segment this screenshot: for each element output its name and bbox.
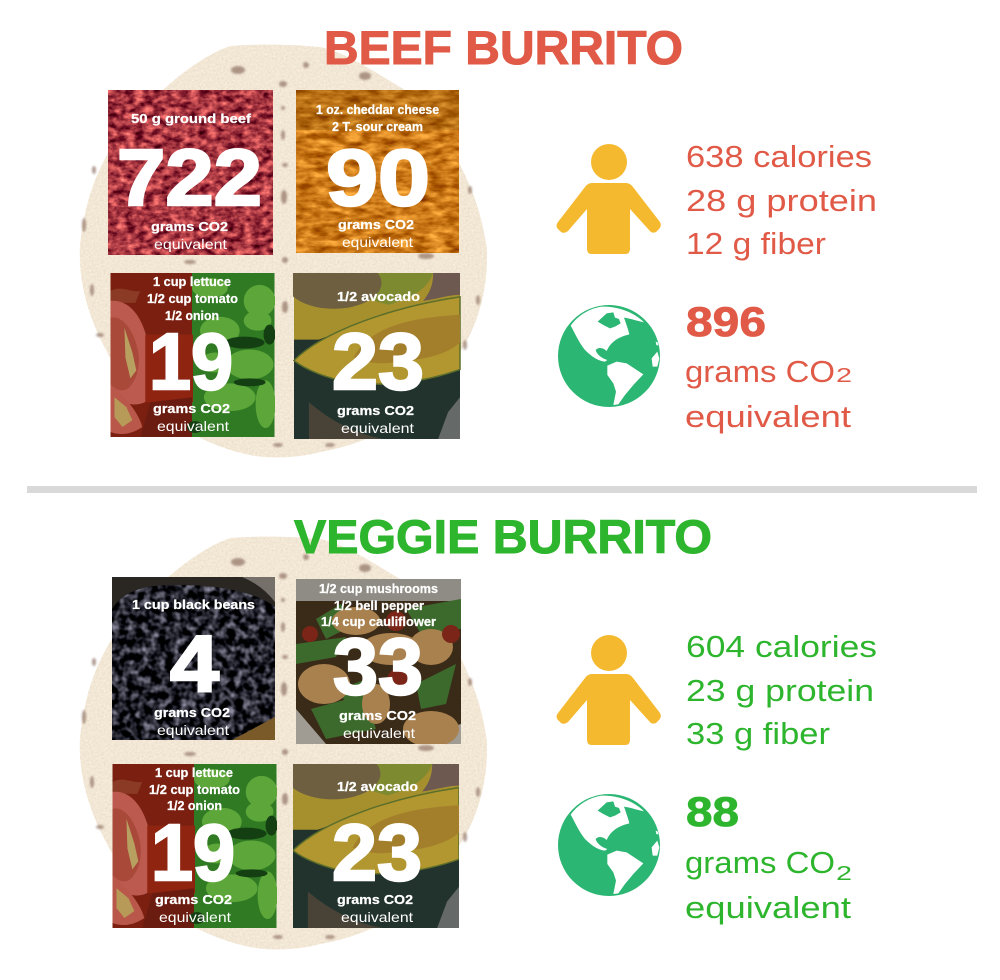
icon: person xyxy=(556,144,661,254)
emissions total: veggie: 2 xyxy=(836,863,852,885)
emissions total: veggie: 88 xyxy=(686,788,739,835)
panel: lettuce, tomato, onion: 1/2 cup tomato xyxy=(149,782,240,797)
icon: globe xyxy=(558,305,660,407)
panel: cheddar and sour cream: equivalent xyxy=(342,234,413,250)
tortilla: beef burrito background xyxy=(80,45,487,457)
panel: ground beef xyxy=(108,90,273,255)
panel: mushrooms, bell pepper, cauliflower: 1/2 bell pepper xyxy=(334,598,424,613)
emissions total: beef: grams CO xyxy=(685,354,835,389)
panel: avocado: 1/2 avocado xyxy=(337,289,420,304)
panel: avocado: grams CO2 xyxy=(337,403,414,418)
panel: black beans: grams CO2 xyxy=(154,705,230,720)
nutrition stats: beef: 638 calories xyxy=(686,139,872,174)
panel: black beans: 4 xyxy=(170,619,220,708)
panel: lettuce, tomato, onion xyxy=(112,764,277,928)
icon: globe xyxy=(558,794,660,896)
panel: lettuce, tomato, onion: grams CO2 xyxy=(153,401,230,416)
emissions total: veggie: grams CO xyxy=(685,845,835,880)
emissions total: beef: 2 xyxy=(836,365,852,387)
panel: lettuce, tomato, onion: 1/2 onion xyxy=(167,798,222,813)
panel: cheddar and sour cream: grams CO2 xyxy=(338,217,414,232)
panel: mushrooms, bell pepper, cauliflower: 1/4 cup cauliflower xyxy=(321,614,436,629)
panel: cheddar and sour cream: 1 oz. cheddar cheese xyxy=(316,102,439,117)
nutrition stats: beef: 12 g fiber xyxy=(686,226,826,261)
panel: lettuce, tomato, onion: 19 xyxy=(151,808,235,897)
title: Veggie Burrito: VEGGIE BURRITO xyxy=(294,510,712,563)
nutrition stats: beef xyxy=(686,139,877,261)
panel: black beans: equivalent xyxy=(157,722,229,738)
emissions total: beef xyxy=(685,298,852,434)
panel: black beans xyxy=(112,577,275,740)
panel: lettuce, tomato, onion: 1/2 cup tomato xyxy=(147,291,238,306)
panel: ground beef: 50 g ground beef xyxy=(131,111,252,126)
icon: person xyxy=(556,635,661,745)
emissions total: veggie xyxy=(685,788,852,925)
nutrition stats: veggie: 23 g protein xyxy=(686,673,874,708)
panel: lettuce, tomato, onion: 1 cup lettuce xyxy=(155,765,233,780)
panel: lettuce, tomato, onion: 1 cup lettuce xyxy=(153,274,231,289)
nutrition stats: veggie: 33 g fiber xyxy=(686,716,830,751)
panel: cheddar and sour cream: 90 xyxy=(326,133,430,222)
panel: lettuce, tomato, onion xyxy=(110,273,275,437)
emissions total: beef: equivalent xyxy=(685,399,851,434)
panel: mushrooms, bell pepper, cauliflower: 1/2 cup mushrooms xyxy=(319,581,438,596)
panel: avocado: grams CO2 xyxy=(337,892,413,907)
panel: ground beef: equivalent xyxy=(154,236,227,252)
panel: lettuce, tomato, onion: grams CO2 xyxy=(155,892,232,907)
panel: avocado: 1/2 avocado xyxy=(337,779,418,794)
panel: avocado: equivalent xyxy=(341,420,414,436)
panel: lettuce, tomato, onion: 1/2 onion xyxy=(165,308,219,323)
panel: cheddar and sour cream: 2 T. sour cream xyxy=(332,119,423,134)
panel: ground beef: grams CO2 xyxy=(151,219,228,234)
panel: avocado: 23 xyxy=(332,808,422,897)
panel: lettuce, tomato, onion: equivalent xyxy=(159,909,231,925)
panel: mushrooms, bell pepper, cauliflower: grams CO2 xyxy=(339,708,416,723)
nutrition stats: veggie xyxy=(686,629,877,751)
panel: avocado: 23 xyxy=(332,317,424,406)
panel: black beans: 1 cup black beans xyxy=(132,597,255,612)
panel: avocado xyxy=(285,748,459,928)
panel: lettuce, tomato, onion: equivalent xyxy=(157,418,229,434)
panel: mushrooms, bell pepper, cauliflower: equivalent xyxy=(343,725,415,741)
emissions total: veggie: equivalent xyxy=(685,890,851,925)
panel: mushrooms, bell pepper, cauliflower: 33 xyxy=(333,622,423,711)
title: Beef Burrito: BEEF BURRITO xyxy=(324,21,683,74)
tortilla: veggie burrito background xyxy=(80,537,487,949)
panel: avocado: equivalent xyxy=(341,909,413,925)
panel: cheddar and sour cream xyxy=(296,90,459,253)
panel: lettuce, tomato, onion: 19 xyxy=(149,317,233,406)
nutrition stats: veggie: 604 calories xyxy=(686,629,877,664)
panel: avocado xyxy=(286,257,460,439)
nutrition stats: beef: 28 g protein xyxy=(686,183,877,218)
panel: mushrooms, bell pepper, cauliflower xyxy=(296,579,461,747)
panel: ground beef: 722 xyxy=(117,133,262,222)
emissions total: beef: 896 xyxy=(686,298,766,345)
